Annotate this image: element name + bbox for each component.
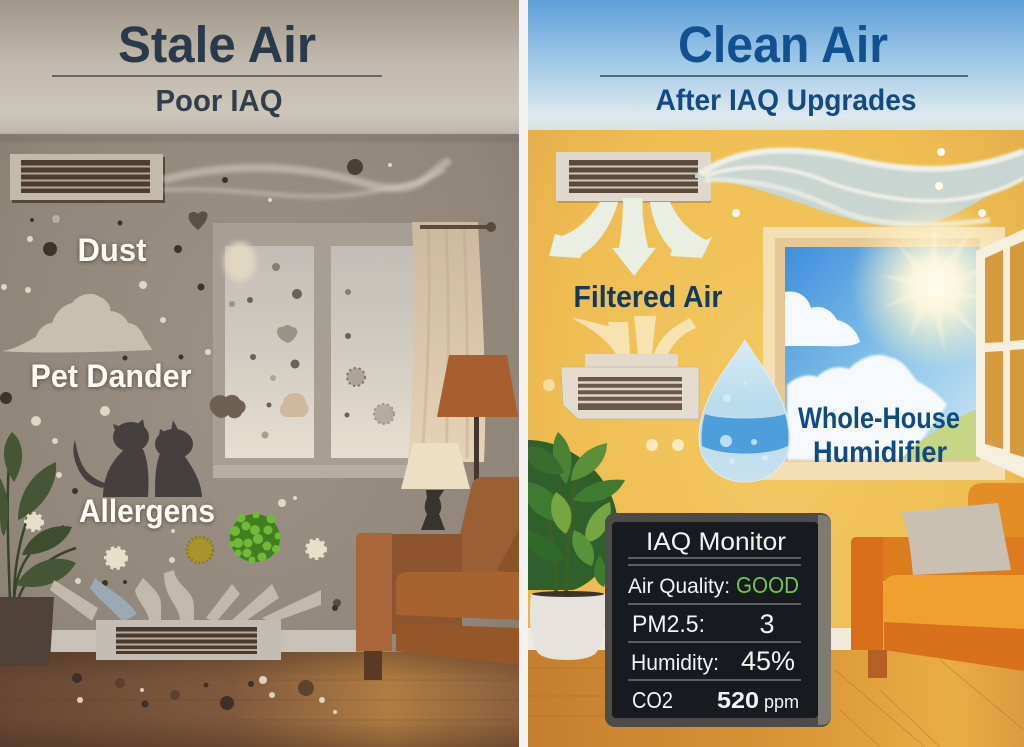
humidity row: Humidity: xyxy=(631,650,719,675)
IAQ monitor: 3 xyxy=(759,609,775,639)
divider xyxy=(519,0,528,747)
IAQ monitor xyxy=(605,513,831,727)
IAQ monitor: GOOD xyxy=(736,572,799,598)
PM2.5 row: PM2.5: xyxy=(632,611,705,638)
stale air stream xyxy=(163,160,450,196)
label: Pet Dander: Pet Dander xyxy=(30,358,192,394)
armchair xyxy=(356,477,519,680)
IAQ monitor: 45% xyxy=(741,646,795,676)
label: Whole-House Humidifier: Whole-House xyxy=(798,402,960,435)
panel: clean air xyxy=(528,0,1024,747)
header band: stale air xyxy=(0,0,519,134)
downward air arrows xyxy=(549,198,712,276)
clean air stream xyxy=(695,149,1024,227)
monitor title: IAQ Monitor xyxy=(646,528,786,556)
cats silhouette xyxy=(73,419,202,497)
pollen green cluster xyxy=(229,512,282,564)
window particles xyxy=(210,263,394,438)
wall particles xyxy=(0,159,392,714)
title: Clean Air: Clean Air xyxy=(678,16,888,73)
return vent xyxy=(96,620,281,660)
baseboard and floor xyxy=(528,628,1024,747)
filter air arrows xyxy=(572,316,696,354)
humidifier water drop xyxy=(699,340,790,482)
header band: clean air xyxy=(528,0,1024,130)
allergen clusters xyxy=(26,512,325,568)
label: Whole-House Humidifier xyxy=(798,402,960,469)
window xyxy=(763,200,1020,480)
subtitle: After IAQ Upgrades: After IAQ Upgrades xyxy=(656,84,916,117)
panel: stale air xyxy=(0,0,519,747)
supply vent xyxy=(556,152,711,203)
label: Dust: Dust xyxy=(78,232,147,268)
IAQ monitor: ppm xyxy=(764,692,799,712)
air quality row: Air Quality: xyxy=(628,575,730,598)
window xyxy=(210,223,420,478)
CO2 row: CO2 xyxy=(632,687,673,713)
plant xyxy=(0,432,76,666)
label: Allergens: Allergens xyxy=(79,493,215,529)
table lamp xyxy=(401,443,470,530)
air arrows from return vent xyxy=(50,570,321,623)
curtain rod xyxy=(420,222,496,232)
filter unit xyxy=(561,354,699,419)
sofa xyxy=(851,483,1024,678)
clouds xyxy=(785,292,947,460)
curtain xyxy=(408,222,485,462)
sparkles xyxy=(543,148,986,451)
baseboard and floor xyxy=(0,630,519,747)
title: Stale Air: Stale Air xyxy=(118,16,316,73)
floor particles xyxy=(72,673,314,710)
label: Whole-House Humidifier: Humidifier xyxy=(813,436,947,469)
subtitle: Poor IAQ: Poor IAQ xyxy=(156,83,282,118)
pillow xyxy=(901,503,1011,575)
floor lamp xyxy=(437,355,518,480)
plant xyxy=(528,432,625,660)
label: Filtered Air: Filtered Air xyxy=(574,279,722,314)
IAQ monitor: 520 xyxy=(717,687,759,713)
open window sash xyxy=(976,229,1024,478)
cloud of dust xyxy=(2,294,152,353)
supply vent xyxy=(10,154,165,203)
sun xyxy=(850,200,1020,370)
